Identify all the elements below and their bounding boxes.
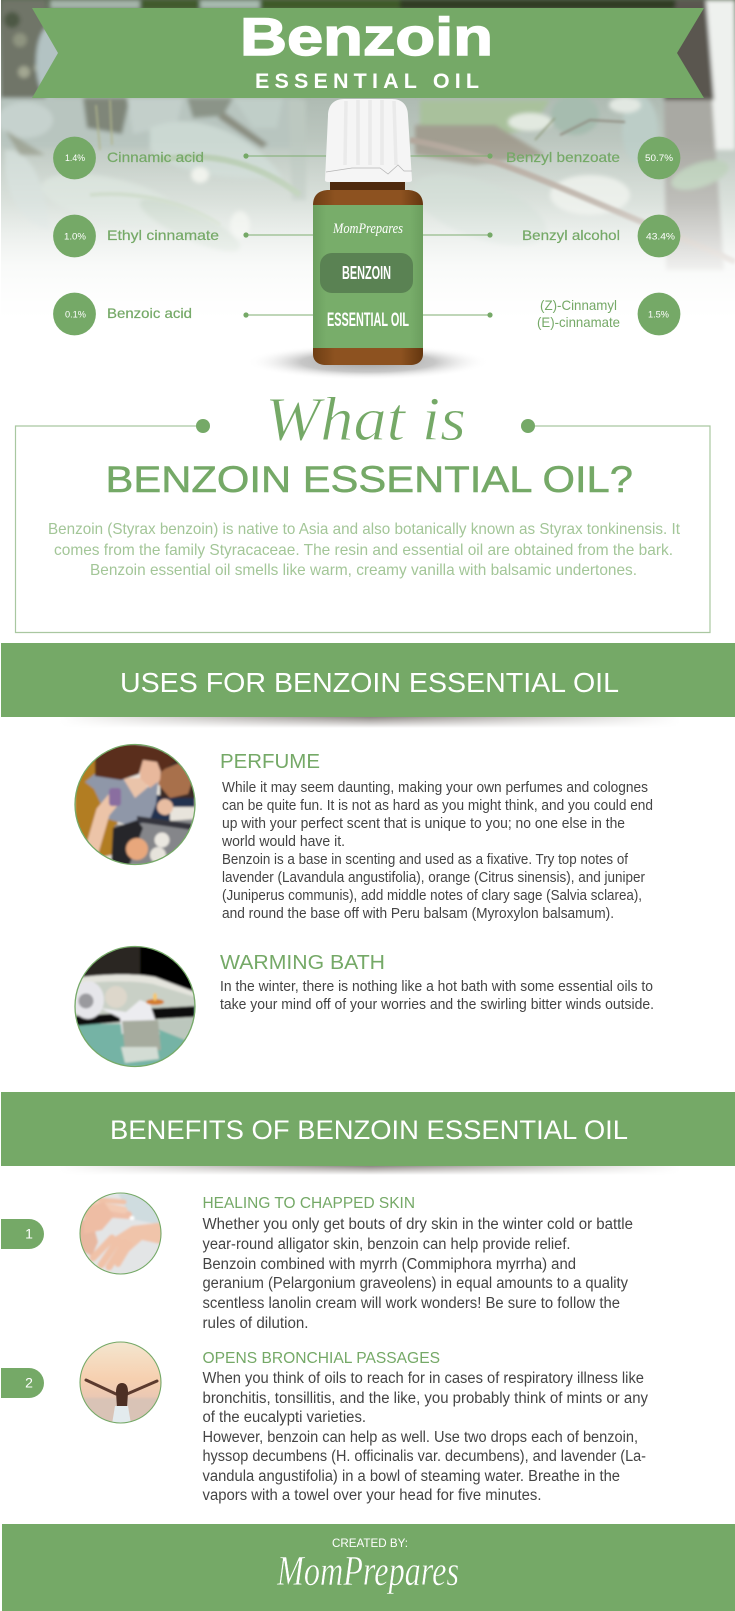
constituent: Benzoic acid 0.1%: Benzoic acid: [107, 305, 192, 321]
text block: warming bath: take your mind off of your worries and the swirling bitter winds outside.: [220, 997, 654, 1013]
title banner: [32, 8, 704, 98]
photo: hand with cream: [78, 1193, 165, 1275]
heading: Warming bath: WARMING BATH: [220, 952, 385, 974]
text block: bronchial: When you think of oils to reach for in cases of respiratory illness like: [202, 1370, 644, 1387]
constituent: Benzyl benzoate 50.7%: Benzyl benzoate: [506, 149, 620, 165]
description paragraph: Benzoin (Styrax benzoin) is native to Asia and also botanically known as Styrax tonkinensis. It: [48, 521, 681, 538]
constituent: Benzyl alcohol 43.4%: [522, 215, 680, 257]
text block: bronchial: hyssop decumbens (H. officinalis var. decumbens), and lavender (La-: [202, 1448, 646, 1465]
text block: perfume: [221, 780, 653, 922]
text block: healing: geranium (Pelargonium graveolens) in equal amounts to a quality: [202, 1275, 628, 1292]
constituent: (Z)-Cinnamyl (E)-cinnamate 1.5%: 1.5%: [648, 310, 670, 320]
section band: uses: [1, 643, 735, 717]
bottle label: brand: MomPrepares: [332, 221, 403, 237]
constituent: Ethyl cinnamate 1.0%: [53, 215, 219, 257]
section band: benefits: [1, 1092, 735, 1166]
constituent: Benzoic acid 0.1%: 0.1%: [65, 310, 87, 320]
constituent: (Z)-Cinnamyl (E)-cinnamate 1.5%: [537, 293, 680, 335]
subtitle: Essential Oil: ESSENTIAL OIL: [255, 69, 479, 93]
constituent: (Z)-Cinnamyl (E)-cinnamate 1.5%: (E)-cinnamate: [537, 314, 620, 330]
bottle label: essential oil: ESSENTIAL OIL: [327, 310, 409, 331]
section band: uses: USES FOR BENZOIN ESSENTIAL OIL: [120, 667, 619, 698]
text block: warming bath: In the winter, there is nothing like a hot bath with some essential oils to: [220, 979, 653, 995]
text block: bronchial: of the eucalypti varieties.: [202, 1409, 366, 1426]
constituent: Cinnamic acid 1.4%: Cinnamic acid: [107, 149, 204, 165]
constituent: Benzyl benzoate 50.7%: 50.7%: [645, 153, 674, 164]
title: Benzoin: Benzoin: [240, 8, 493, 67]
footer: [2, 1524, 735, 1611]
band shadow: [60, 717, 680, 728]
text block: perfume: can be quite fun. It is not as hard as you might think, and you could end: [222, 798, 653, 814]
text block: perfume: world would have it.: [221, 834, 345, 850]
text block: bronchial: vandula angustifolia) in a bowl of steaming water. Breathe in the: [202, 1468, 620, 1485]
number tab 1: 1: [25, 1226, 33, 1242]
text block: healing: rules of dilution.: [202, 1315, 308, 1332]
text block: warming bath: [220, 979, 654, 1013]
heading: Healing to chapped skin: HEALING TO CHAPPED SKIN: [202, 1195, 415, 1212]
constituent: Cinnamic acid 1.4%: 1.4%: [65, 153, 86, 164]
section band: benefits: BENEFITS OF BENZOIN ESSENTIAL OIL: [110, 1115, 628, 1145]
text block: healing: Whether you only get bouts of dry skin in the winter cold or battle: [202, 1216, 633, 1233]
heading: Perfume: PERFUME: [220, 751, 320, 773]
photo: warming bath: [72, 946, 196, 1067]
number tab 2: 2: [25, 1374, 33, 1390]
footer: logo: MomPrepares: [276, 1549, 459, 1595]
description paragraph: comes from the family Styracaceae. The resin and essential oil are obtained from the bark.: [54, 542, 673, 559]
constituent: Ethyl cinnamate 1.0%: 1.0%: [64, 232, 87, 242]
bottle label: name plate: BENZOIN: [342, 263, 391, 283]
band shadow: [60, 1166, 680, 1175]
text block: healing: year-round alligator skin, benzoin can help provide relief.: [202, 1236, 570, 1253]
script heading: What is: What is: [265, 386, 466, 454]
constituent: Ethyl cinnamate 1.0%: Ethyl cinnamate: [107, 227, 219, 243]
connector lines: [243, 153, 493, 318]
heading: Opens bronchial passages: OPENS BRONCHIAL PASSAGES: [202, 1350, 440, 1367]
text block: healing: Benzoin combined with myrrh (Commiphora myrrha) and: [202, 1256, 576, 1273]
bottle label: name plate: [320, 253, 413, 293]
footer: created by: CREATED BY:: [332, 1536, 408, 1550]
text block: perfume: (Juniperus communis), add middle notes of clary sage (Salvia sclarea),: [222, 888, 642, 904]
text block: bronchial: bronchitis, tonsillitis, and the like, you probably think of mints or any: [202, 1390, 648, 1407]
bottle shadow: [246, 344, 490, 380]
number tab 1: [1, 1219, 44, 1249]
text block: perfume: While it may seem daunting, making your own perfumes and colognes: [222, 780, 648, 796]
text block: perfume: up with your perfect scent that is unique to you; no one else in the: [222, 816, 625, 832]
text block: bronchial: [202, 1370, 648, 1504]
constituent: Benzyl alcohol 43.4%: 43.4%: [646, 232, 676, 242]
description paragraph: [48, 521, 681, 579]
heading: Benzoin essential oil?: BENZOIN ESSENTIAL OIL?: [106, 458, 633, 500]
constituent: Benzyl alcohol 43.4%: Benzyl alcohol: [522, 227, 620, 243]
bottle: [313, 99, 423, 365]
text block: bronchial: However, benzoin can help as well. Use two drops each of benzoin,: [202, 1429, 638, 1446]
text block: perfume: and round the base off with Peru balsam (Myroxylon balsamum).: [222, 906, 614, 922]
constituent: Cinnamic acid 1.4%: [53, 137, 204, 179]
photo: woman with raised arms at the sea: [80, 1342, 162, 1424]
text block: perfume: Benzoin is a base in scenting and used as a fixative. Try top notes of: [222, 852, 629, 868]
text block: healing: [202, 1216, 633, 1332]
background photo: leaves and branches: [1, 0, 735, 272]
number tab 2: [1, 1368, 44, 1398]
panel: what is benzoin essential oil: [16, 386, 710, 632]
description paragraph: Benzoin essential oil smells like warm, creamy vanilla with balsamic undertones.: [90, 562, 637, 579]
constituent: Benzyl benzoate 50.7%: [506, 137, 680, 179]
bottle cap: [325, 99, 412, 182]
text block: perfume: lavender (Lavandula angustifolia), orange (Citrus sinensis), and juniper: [222, 870, 645, 886]
text block: bronchial: vapors with a towel over your head for five minutes.: [202, 1487, 542, 1504]
text block: healing: scentless lanolin cream will work wonders! Be sure to follow the: [202, 1295, 620, 1312]
constituent: Benzoic acid 0.1%: [53, 293, 192, 335]
photo: woman spraying perfume: [75, 744, 197, 866]
constituent: (Z)-Cinnamyl (E)-cinnamate 1.5%: (Z)-Cinnamyl: [540, 297, 617, 313]
